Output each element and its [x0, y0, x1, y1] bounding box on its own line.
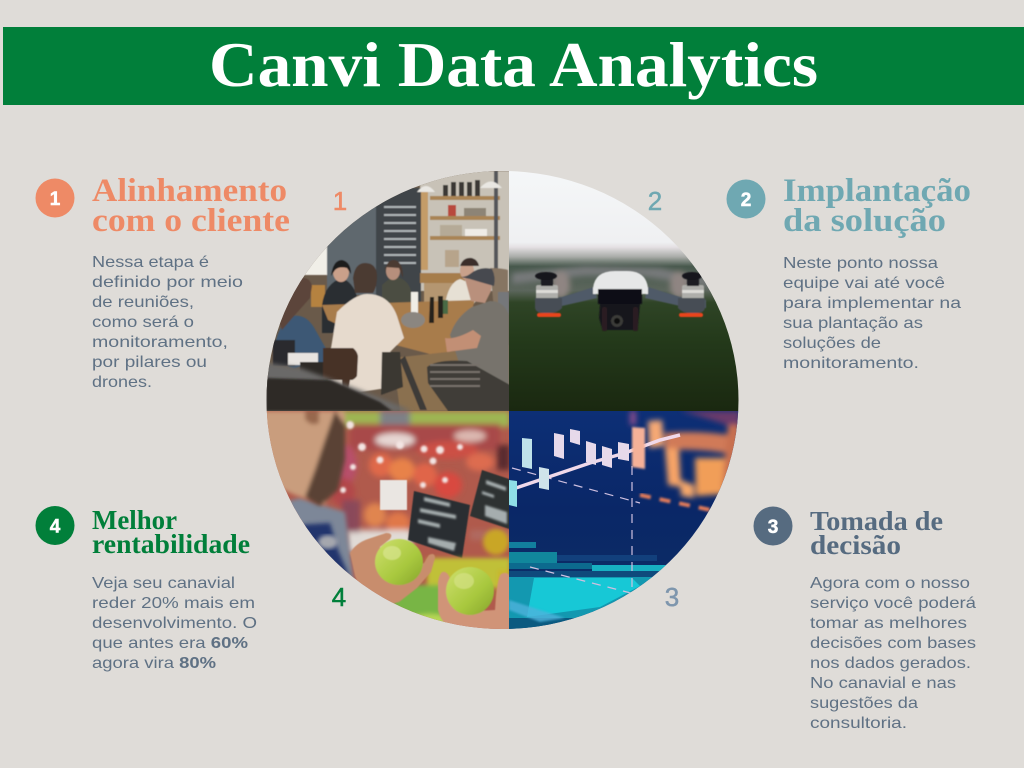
text 1: como será o [92, 314, 194, 331]
text 4: que antes era 60% [92, 635, 248, 652]
text 3: decisões com bases [810, 635, 976, 652]
text 1: definido por meio [92, 274, 243, 291]
text 1: monitoramento, [92, 334, 228, 351]
photo: financial chart [509, 411, 740, 629]
blurred foreground rail [262, 362, 412, 411]
text 3: tomar as melhores [810, 615, 967, 632]
heading 4 [92, 505, 250, 559]
table [322, 300, 475, 358]
text 4: desenvolvimento. O [92, 615, 257, 632]
text 2 [783, 255, 961, 372]
text 3: consultoria. [810, 715, 907, 732]
face [262, 411, 345, 506]
photo: shopper with apples [262, 411, 512, 630]
badge 1 [36, 178, 74, 218]
heading 1: com o cliente [92, 203, 290, 239]
text 2: sua plantação as [783, 315, 923, 332]
heading 4: rentabilidade [92, 529, 250, 559]
photo: team meeting [262, 170, 510, 411]
body [593, 271, 648, 294]
woman in denim [276, 315, 326, 368]
motors [536, 285, 558, 299]
title: Canvi Data Analytics [209, 29, 818, 100]
bokeh [340, 421, 463, 493]
text 1: Nessa etapa é [92, 254, 209, 271]
man in grey [450, 301, 509, 390]
heading 3: Tomada de [810, 506, 943, 536]
text 4: Veja seu canavial [92, 575, 235, 592]
heading 2 [783, 173, 971, 239]
badge 2: 2 [741, 190, 751, 211]
section 4: Melhor rentabilidade [36, 505, 257, 672]
text 1: por pilares ou [92, 354, 207, 371]
man in white [324, 294, 404, 394]
text 3: No canavial e nas [810, 675, 956, 692]
shirt [290, 496, 356, 578]
heading 3: decisão [810, 530, 901, 560]
number 4: 4 [332, 582, 346, 612]
text 3: Agora com o nosso [810, 575, 970, 592]
section 2: Implantação da solução [726, 173, 971, 372]
badge 2 [726, 180, 766, 218]
text 2: Neste ponto nossa [783, 255, 938, 272]
text 4 [92, 575, 257, 672]
text 3: nos dados gerados. [810, 655, 971, 672]
blurred orange candles [630, 411, 740, 498]
heading 2: Implantação [783, 173, 971, 209]
text 1 [92, 254, 243, 391]
text 4: reder 20% mais em [92, 595, 255, 612]
badge 3: 3 [768, 517, 778, 538]
section 1: Alinhamento com o cliente [36, 173, 290, 391]
text 3: sugestões da [810, 695, 918, 712]
quadrant numbers [332, 186, 679, 612]
text 2: equipe vai até você [783, 275, 945, 292]
heading 1 [92, 173, 290, 239]
people behind [322, 278, 358, 333]
text 2: monitoramento. [783, 355, 919, 372]
candles [509, 427, 680, 507]
number 2: 2 [648, 186, 662, 216]
text 1: drones. [92, 374, 152, 391]
badge 1: 1 [50, 189, 61, 210]
heading 4: Melhor [92, 505, 177, 535]
text 3 [810, 575, 976, 732]
teal blocks [509, 542, 679, 629]
heading 3 [810, 506, 943, 560]
number 3: 3 [665, 582, 679, 612]
number 1: 1 [333, 186, 347, 216]
title banner [3, 27, 1024, 105]
badge 4: 4 [50, 516, 61, 538]
heading 1: Alinhamento [92, 173, 287, 209]
section 3: Tomada de decisão [754, 506, 976, 732]
badge 3 [754, 506, 792, 546]
text 2: para implementar na [783, 295, 961, 312]
arms [559, 287, 598, 306]
badge 4 [36, 506, 74, 545]
text 4: agora vira 80% [92, 655, 216, 672]
photo circle [262, 170, 740, 630]
heading 2: da solução [783, 203, 946, 239]
hands and apples [350, 533, 511, 630]
text 2: soluções de [783, 335, 881, 352]
text 3: serviço você poderá [810, 595, 976, 612]
dashed lines [512, 466, 650, 598]
red lights [537, 313, 561, 317]
photo: drone [509, 170, 740, 411]
text 1: de reuniões, [92, 294, 194, 311]
